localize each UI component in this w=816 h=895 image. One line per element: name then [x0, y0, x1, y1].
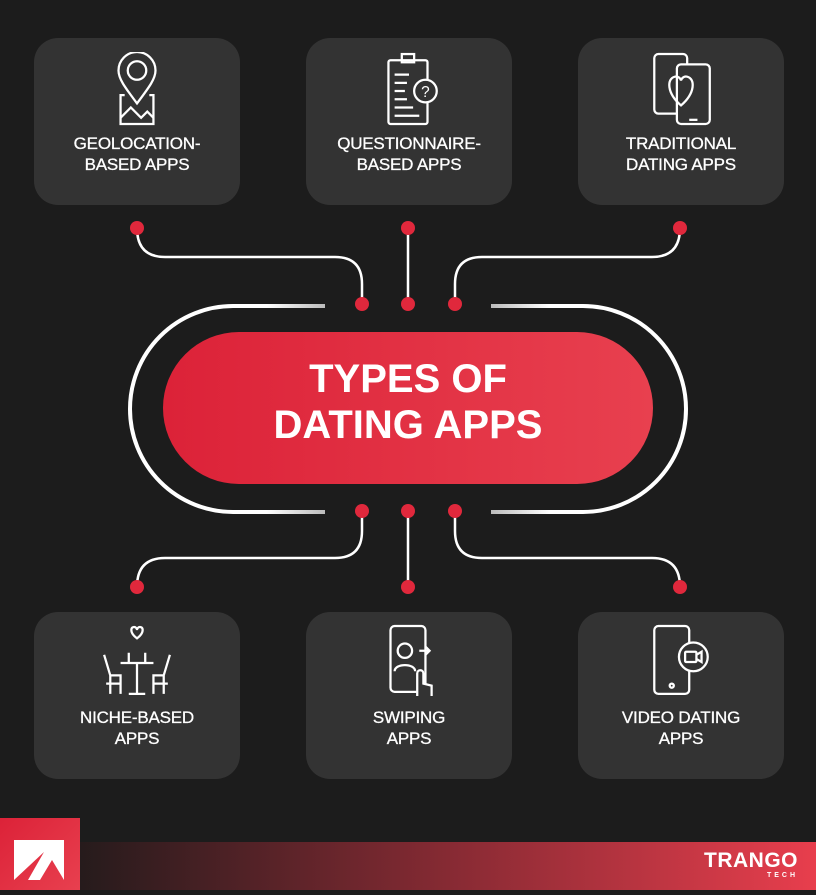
icon: clipboard	[387, 52, 438, 126]
label: QUESTIONNAIRE-	[337, 134, 481, 153]
label	[622, 708, 740, 748]
icon: phones with heart	[653, 52, 711, 126]
label: APPS	[659, 729, 703, 748]
label: APPS	[387, 729, 431, 748]
panel: traditional	[578, 38, 784, 205]
label: BASED APPS	[357, 155, 461, 174]
title: DATING APPS	[274, 403, 542, 447]
title: TYPES OF	[309, 357, 507, 401]
panel: video	[578, 612, 784, 779]
label: NICHE-BASED	[80, 708, 194, 727]
title	[274, 357, 542, 447]
label	[74, 134, 200, 174]
label: BASED APPS	[85, 155, 189, 174]
label: VIDEO DATING	[622, 708, 740, 727]
footer logo mark	[0, 818, 80, 890]
label	[626, 134, 736, 174]
label: DATING APPS	[626, 155, 736, 174]
icon: video phone	[653, 624, 709, 695]
panel: geolocation	[34, 38, 240, 205]
label: TRADITIONAL	[626, 134, 736, 153]
icon: clipboard: ?	[421, 84, 430, 101]
label	[373, 708, 445, 748]
brand logo: TECH	[767, 872, 798, 879]
icon: dinner table	[103, 626, 171, 695]
brand logo: TRANGO	[704, 849, 798, 872]
label: GEOLOCATION-	[74, 134, 200, 153]
icon: swipe phone	[389, 624, 433, 696]
panel: questionnaire	[306, 38, 512, 205]
label: SWIPING	[373, 708, 445, 727]
label	[337, 134, 481, 174]
label: APPS	[115, 729, 159, 748]
icon: map pin	[117, 52, 157, 126]
panel: swiping	[306, 612, 512, 779]
panel: niche	[34, 612, 240, 779]
label	[80, 708, 194, 748]
